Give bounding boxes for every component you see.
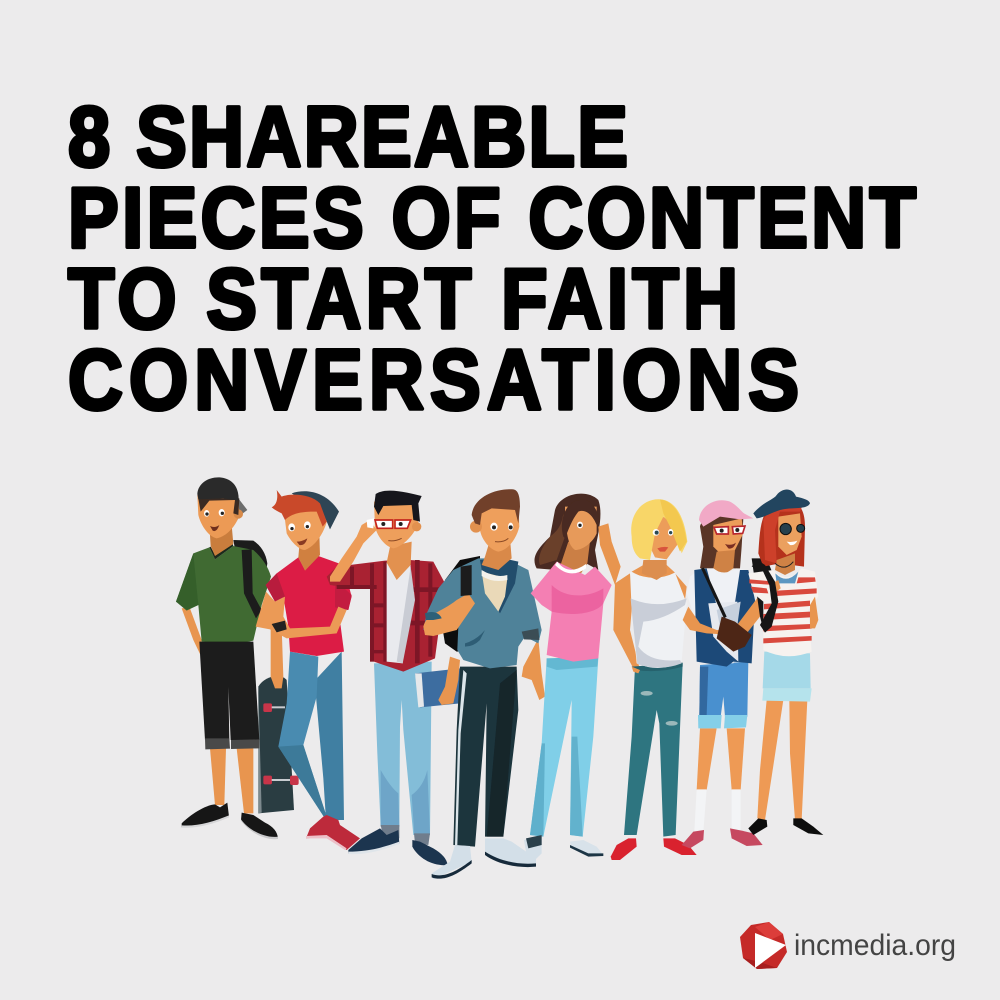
person 3: plaid shirt with glasses bbox=[327, 491, 460, 865]
logo: incmedia.org bbox=[740, 922, 956, 969]
person 6: blonde in white top bbox=[611, 499, 697, 860]
logo wordmark: incmedia.org bbox=[794, 929, 956, 962]
person 5: pink shirt bbox=[524, 494, 621, 860]
logo icon: red polygon play button bbox=[740, 922, 787, 969]
person 7: pink cap and blue vest bbox=[682, 500, 781, 848]
person 8: hat and striped shirt bbox=[748, 490, 823, 835]
title: CONVERSATIONS bbox=[68, 333, 799, 428]
title: PIECES OF CONTENT bbox=[68, 171, 916, 266]
title: 8 SHAREABLE bbox=[68, 90, 628, 185]
illustration: group of eight young people bbox=[176, 477, 823, 879]
title bbox=[68, 90, 916, 428]
person 2: red shirt bbox=[256, 490, 360, 850]
person 4: teal hoodie with backpack bbox=[423, 489, 545, 879]
person 1: green shirt bbox=[176, 477, 278, 839]
skateboard bbox=[258, 676, 299, 813]
title: TO START FAITH bbox=[68, 252, 738, 347]
